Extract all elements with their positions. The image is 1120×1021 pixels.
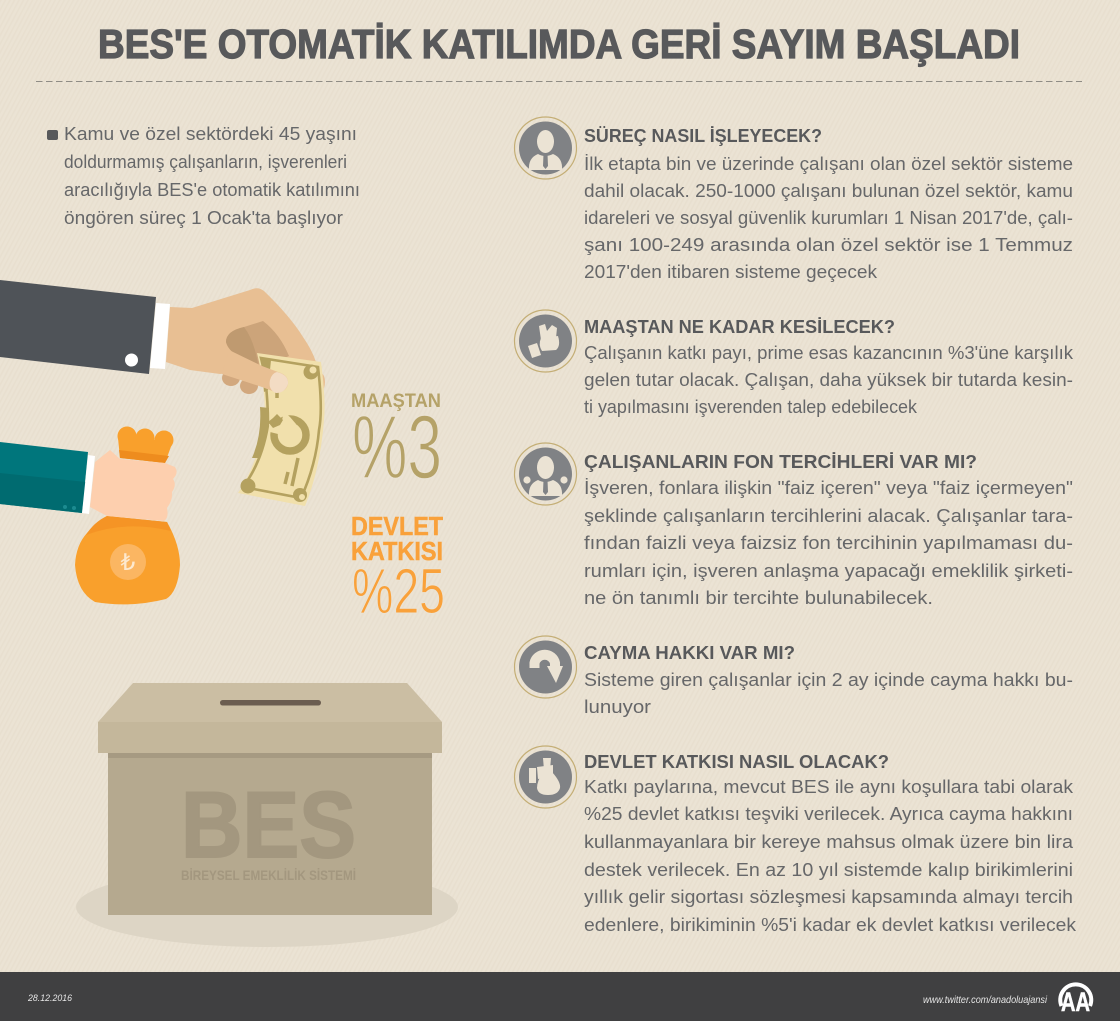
section: maaştan ne kadar kesilecek: ti yapılmasını işverenden talep edebilecek — [584, 397, 918, 417]
icon: hand with money bag — [514, 746, 576, 808]
section: çalışanların fon tercihleri: İşveren, fonlara ilişkin "faiz içeren" veya "faiz içermeyen" — [584, 478, 1073, 498]
twitter address: www.twitter.com/anadoluajansi — [923, 994, 1048, 1006]
section: süreç nasıl işleyecek: dahil olacak. 250-1000 çalışanı bulunan özel sektör, kamu — [584, 181, 1073, 201]
lid front — [98, 722, 442, 753]
lid top — [98, 683, 442, 722]
note emblem — [274, 419, 306, 451]
logo: AA: AA — [1061, 987, 1090, 1017]
section: devlet katkısı: edenlere, birikiminin %5'i kadar ek devlet katkısı verilecek — [584, 915, 1077, 935]
section: devlet katkısı: Katkı paylarına, mevcut BES ile aynı koşullara tabi olarak — [584, 777, 1074, 797]
bag neck — [118, 426, 174, 463]
intro text block: doldurmamış çalışanların, işverenleri — [64, 152, 347, 172]
illustration: BES box — [76, 683, 458, 947]
illustration: BES box: BİREYSEL EMEKLİLİK SİSTEMİ — [181, 867, 356, 883]
lira coin — [110, 544, 146, 580]
fingernail — [270, 372, 288, 393]
section: çalışanların fon tercihleri: ÇALIŞANLARIN FON TERCİHLERİ VAR MI? — [584, 452, 977, 472]
section: çalışanların fon tercihleri: fından faizli veya faizsiz fon tercihinin yapılmaması du- — [584, 533, 1073, 553]
section: maaştan ne kadar kesilecek: gelen tutar olacak. Çalışan, daha yüksek bir tutarda kesin- — [584, 370, 1073, 390]
intro text block: Kamu ve özel sektördeki 45 yaşını — [64, 124, 357, 144]
section: çalışanların fon tercihleri: rumları için, işveren anlaşma yapacağı emeklilik şirketi- — [584, 561, 1073, 581]
section: devlet katkısı — [514, 746, 1077, 935]
section: cayma hakkı: CAYMA HAKKI VAR MI? — [584, 643, 795, 663]
banknote — [238, 353, 325, 506]
section: süreç nasıl işleyecek — [514, 117, 1073, 282]
section: maaştan ne kadar kesilecek — [514, 310, 1074, 417]
icon: money in hand — [514, 310, 576, 372]
section: maaştan ne kadar kesilecek: MAAŞTAN NE KADAR KESİLECEK? — [584, 317, 895, 337]
section: devlet katkısı: DEVLET KATKISI NASIL OLACAK? — [584, 752, 889, 772]
section: süreç nasıl işleyecek: 2017'den itibaren sisteme geçecek — [584, 262, 878, 282]
section: cayma hakkı: lunuyor — [584, 697, 651, 717]
fingers behind note — [222, 370, 325, 394]
section: çalışanların fon tercihleri: şeklinde çalışanların tercihlerini alacak. Çalışanlar tara- — [584, 506, 1073, 526]
illustration: adult hand holding banknote — [0, 280, 325, 506]
note corners and bands — [252, 407, 269, 458]
section: süreç nasıl işleyecek: idareleri ve sosyal güvenlik kurumları 1 Nisan 2017'de, çalı- — [584, 208, 1073, 228]
floor shadow — [76, 867, 458, 947]
box body — [108, 753, 432, 915]
lira coin: ₺ — [121, 549, 136, 575]
jacket sleeve — [0, 280, 156, 374]
illustration: hand holding money bag — [0, 426, 180, 604]
money bag body — [75, 516, 180, 604]
section: süreç nasıl işleyecek: SÜREÇ NASIL İŞLEYECEK? — [584, 126, 822, 146]
section: devlet katkısı: %25 devlet katkısı teşviki verilecek. Ayrıca cayma hakkını — [584, 804, 1073, 824]
label: maaştan %3: %3 — [352, 398, 442, 498]
section: cayma hakkı — [514, 636, 1073, 717]
section: maaştan ne kadar kesilecek: Çalışanın katkı payı, prime esas kazancının %3'üne karşılık — [584, 343, 1074, 363]
label: devlet katkısı %25: DEVLET — [351, 511, 443, 541]
section: devlet katkısı: yıllık gelir sigortası sözleşmesi kapsamında almayı tercih — [584, 887, 1073, 907]
label: devlet katkısı %25: KATKISI — [351, 536, 443, 566]
label: devlet katkısı %25 — [351, 511, 445, 627]
intro text block — [47, 124, 360, 228]
shirt cuff — [125, 303, 170, 369]
section: çalışanların fon tercihleri: ne ön tanımlı bir tercihte bulunabilecek. — [584, 588, 933, 608]
bag shadow — [86, 516, 171, 535]
child hand — [90, 450, 177, 521]
section: çalışanların fon tercihleri — [514, 443, 1073, 608]
box label: BES — [181, 772, 356, 877]
title: BES'E OTOMATİK KATILIMDA GERİ SAYIM BAŞLADI — [98, 21, 1020, 67]
icon: u-turn arrow — [514, 636, 576, 698]
intro text block: aracılığıyla BES'e otomatik katılımını — [64, 180, 360, 200]
label: maaştan %3 — [351, 391, 442, 498]
label: maaştan %3: MAAŞTAN — [351, 391, 441, 412]
section: süreç nasıl işleyecek: şanı 100-249 arasında olan özel sektör ise 1 Temmuz — [584, 235, 1073, 255]
footer bar — [0, 972, 1120, 1021]
section: devlet katkısı: destek verilecek. En az 10 yıl sistemde kalıp birikimlerini — [584, 860, 1073, 880]
intro text block: öngören süreç 1 Ocak'ta başlıyor — [64, 208, 343, 228]
index finger — [222, 350, 288, 392]
section: süreç nasıl işleyecek: İlk etapta bin ve üzerinde çalışanı olan özel sektör sisteme — [584, 154, 1073, 174]
slot — [220, 700, 321, 706]
label: devlet katkısı %25: %25 — [352, 555, 445, 627]
section: cayma hakkı: Sisteme giren çalışanlar için 2 ay içinde cayma hakkı bu- — [584, 670, 1073, 690]
palm shadow — [226, 321, 289, 368]
hand — [166, 288, 316, 374]
icon: businessman with colleagues — [514, 443, 576, 505]
icon: businessman — [514, 117, 576, 179]
date: 28.12.2016 — [27, 993, 73, 1004]
teal sleeve — [0, 442, 88, 513]
section: devlet katkısı: kullanmayanlara bir kereye mahsus olmak üzere bin lira — [584, 832, 1074, 852]
